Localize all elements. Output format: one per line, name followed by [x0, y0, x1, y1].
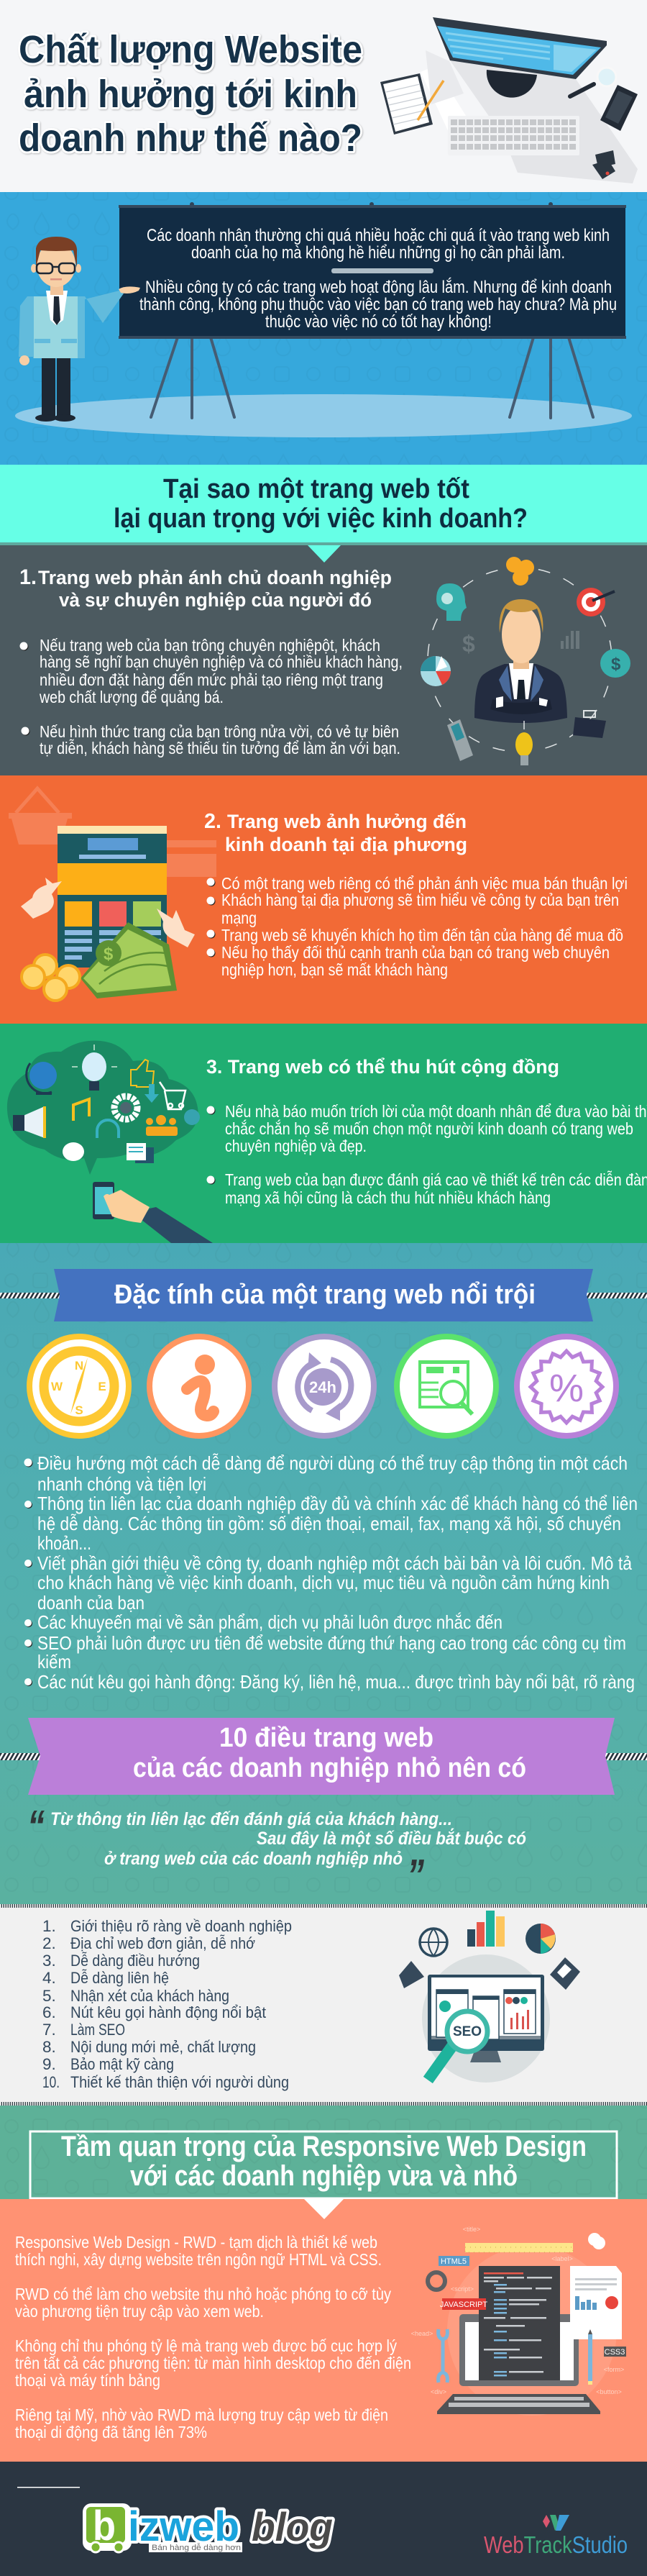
- icon: small globe: [184, 1109, 200, 1125]
- icon: 24h support: 24h: [309, 1378, 336, 1396]
- text block: feature list: doanh của bạn: [37, 1592, 144, 1614]
- panel: reason 2: [0, 775, 647, 1024]
- icon: piggy bank: $: [611, 655, 621, 674]
- logo: bizweb blog: [83, 2503, 333, 2552]
- icon: percent badge: [517, 1337, 616, 1436]
- quote: ở trang web của các doanh nghiệp nhỏ: [104, 1849, 403, 1869]
- label: CSS3: CSS3: [605, 2348, 625, 2357]
- icon: faint bars: [561, 631, 579, 649]
- html tags: <title>: [463, 2226, 480, 2233]
- quote: [27, 1802, 526, 1901]
- logo: bizweb blog: blog: [252, 2504, 333, 2549]
- icon: compass: N: [75, 1359, 83, 1373]
- banner heading: 10 things: 10 điều trang web: [219, 1723, 433, 1753]
- icon: pie chart: [421, 656, 451, 686]
- icon: music note: [73, 1099, 89, 1121]
- text block: vào phương tiện truy cập vào xem web.: [15, 2302, 264, 2321]
- icon: globe: [420, 1929, 447, 1956]
- text block: Nếu trang web của bạn trông chuyên nghiệpột, khách: [40, 636, 380, 655]
- label: JAVASCRIPT: JAVASCRIPT: [440, 2300, 487, 2309]
- icon: shopping cart: [160, 1082, 185, 1109]
- numbered list: Bảo mật kỹ càng: [70, 2055, 174, 2073]
- heading: và sự chuyên nghiệp của người đó: [59, 589, 372, 611]
- icon: gear: [428, 2272, 445, 2290]
- icon: headphones: [97, 1120, 119, 1138]
- numbered list: 7.: [42, 2021, 56, 2039]
- numbered list: 2.: [42, 1934, 56, 1952]
- text block: [207, 874, 628, 979]
- text block: nhiều đơn đặt hàng đến mức phải tạo riêng một trang: [40, 670, 383, 689]
- heading: [61, 2131, 587, 2192]
- numbered list: [42, 1917, 292, 2091]
- icon: lightbulb: [515, 721, 533, 765]
- text block: feature list: kiếm: [37, 1651, 71, 1672]
- text block: [15, 2233, 411, 2441]
- icon: gear: [114, 1096, 137, 1119]
- numbered list: Nhận xét của khách hàng: [70, 1987, 229, 2005]
- icon: chat bubble: [127, 1143, 154, 1163]
- icon: wrench: [439, 2329, 447, 2382]
- text block: nghiệp hơn, bạn sẽ mất khách hàng: [221, 960, 448, 979]
- numbered list: Thiết kế thân thiện với người dùng: [70, 2073, 289, 2091]
- html tags: [411, 2226, 624, 2395]
- icon: credit cards: [592, 150, 615, 179]
- icon: compass: W: [51, 1380, 63, 1393]
- icon: piggy bank: [600, 649, 630, 678]
- text block: Responsive Web Design - RWD - tạm dịch là thiết kế web: [15, 2233, 377, 2252]
- heading: 2.: [204, 810, 221, 833]
- numbered list: 9.: [42, 2055, 56, 2073]
- icon: SEO dashboard: [399, 1911, 580, 2083]
- text block: feature list: Các khuyeến mại về sản phẩm, dịch vụ phải luôn được nhắc đến: [37, 1611, 503, 1633]
- numbered list: 5.: [42, 1987, 56, 2005]
- numbered list: 4.: [42, 1969, 56, 1987]
- icon: compass: E: [98, 1380, 106, 1393]
- text block: feature list: nhanh chóng và tiện lợi: [37, 1473, 206, 1495]
- text block: Không chỉ thu phóng tỷ lệ mà trang web được bố cục hợp lý: [15, 2336, 397, 2355]
- icon: mobile phone: [447, 719, 473, 761]
- text block: feature list: [24, 1452, 638, 1693]
- icon: coins: [506, 557, 534, 586]
- label: HTML5: HTML5: [441, 2257, 467, 2266]
- panel: footer: [0, 2462, 647, 2576]
- title: [19, 28, 362, 160]
- icon: pencil: [588, 2329, 592, 2385]
- html tags: <form>: [604, 2366, 624, 2373]
- icon: download arrow: [144, 1084, 159, 1103]
- panel: header: [0, 0, 647, 192]
- numbered list: 1.: [42, 1917, 56, 1935]
- icon: presenter man: [19, 237, 140, 422]
- intro text: [139, 226, 617, 332]
- html tags: <label>: [551, 2255, 573, 2262]
- title: doanh như thế nào?: [19, 117, 362, 160]
- heading: với các doanh nghiệp vừa và nhỏ: [130, 2160, 518, 2192]
- panel: reason 3: [0, 1024, 647, 1243]
- panel: intro with blackboard: [0, 192, 647, 465]
- numbered list: Làm SEO: [70, 2021, 125, 2039]
- heading: Trang web phản ánh chủ doanh nghiệp: [38, 567, 392, 588]
- html tags: <button>: [596, 2388, 622, 2395]
- title: Chất lượng Website: [19, 28, 362, 71]
- panel: outstanding features: [0, 1243, 647, 1904]
- numbered list: Địa chỉ web đơn giản, dễ nhớ: [70, 1934, 255, 1952]
- text block: mạng: [221, 909, 257, 927]
- logo: WebTrackStudio: WebTrackStudio: [484, 2531, 628, 2558]
- numbered list: 6.: [42, 2003, 56, 2021]
- heading: Tại sao một trang web tốt: [163, 474, 469, 504]
- icon: envelope: [399, 1961, 424, 1988]
- text block: feature list: khoản...: [37, 1532, 91, 1554]
- text block: hàng sẽ nghĩ bạn chuyên nghiệp và có nhiều khách hàng,: [40, 652, 403, 671]
- panel: why heading: [0, 465, 647, 545]
- html tags: <head>: [411, 2330, 433, 2337]
- banner heading: [54, 1269, 593, 1321]
- icon: globe: [27, 1062, 57, 1095]
- text block: [207, 1102, 647, 1207]
- icon: head with gear: [436, 583, 467, 621]
- icon: info: [150, 1337, 249, 1436]
- icon: compass: S: [75, 1403, 83, 1417]
- icon: lightbulb: [72, 1044, 117, 1091]
- logo: bizweb blog: b: [93, 2503, 116, 2549]
- quote: “: [27, 1802, 45, 1852]
- text block: chuyên nghiệp và đẹp.: [225, 1137, 367, 1155]
- icon: ruler: [465, 2243, 573, 2252]
- heading: Trang web ảnh hưởng đến: [227, 811, 467, 832]
- heading: 1.: [19, 565, 37, 589]
- numbered list: 8.: [42, 2038, 56, 2056]
- icon: laptop with code: [411, 2226, 626, 2416]
- icon: speech cloud of social icons: [7, 1041, 200, 1175]
- heading: [114, 474, 528, 534]
- icon: desk with monitor: [380, 17, 638, 183]
- panel: reason 1: [0, 545, 647, 775]
- board: [119, 202, 626, 418]
- icon: website on phone: [21, 826, 195, 1001]
- icon: briefcase: [573, 711, 606, 738]
- text block: Nếu hình thức trang của bạn trông nửa vời, có vẻ tự biên: [40, 722, 399, 741]
- numbered list: Giới thiệu rõ ràng về doanh nghiệp: [70, 1917, 292, 1935]
- text block: RWD có thể làm cho website thu nhỏ hoặc phóng to cỡ tùy: [15, 2285, 391, 2303]
- icon: bird: [63, 1142, 84, 1161]
- banner heading: 10 things: [28, 1718, 615, 1795]
- text block: thoại và máy tính bảng: [15, 2371, 160, 2390]
- icon: percent badge: %: [549, 1367, 584, 1410]
- logo: bizweb blog: izweb: [128, 2503, 239, 2550]
- intro text: thuộc vào việc nó có tốt hay không!: [265, 312, 492, 332]
- icon: calculator: [550, 1957, 580, 1990]
- logo: bizweb blog: Bán hàng dễ dàng hơn: [152, 2543, 241, 2552]
- icon: megaphone: [13, 1106, 46, 1138]
- numbered list: Nội dung mới mẻ, chất lượng: [70, 2038, 256, 2056]
- quote: Sau đây là một số điều bắt buộc có: [257, 1828, 526, 1849]
- banner heading: Đặc tính của một trang web nổi trội: [114, 1280, 536, 1310]
- panel: responsive design heading: [0, 2106, 647, 2199]
- code panel: [479, 2266, 560, 2380]
- heading: lại quan trọng với việc kinh doanh?: [114, 504, 528, 534]
- icon: hand holding phone: [93, 1182, 213, 1243]
- numbered list: 3.: [42, 1952, 56, 1970]
- text block: web chất lượng để quảng bá.: [39, 688, 224, 706]
- text block: trên tất cả các phương tiện: từ màn hình desktop cho đến điện: [15, 2354, 411, 2372]
- heading: [19, 565, 392, 611]
- icon: bar chart: [467, 1911, 505, 1947]
- quote: ”: [407, 1851, 424, 1901]
- icon: cloud: [588, 2233, 605, 2249]
- quote: Từ thông tin liên lạc đến đánh giá của khách hàng...: [50, 1809, 452, 1829]
- text block: tự diễn, khách hàng sẽ thiếu tin tưởng để làm ăn với bạn.: [40, 739, 400, 757]
- icon: people: [146, 1115, 178, 1136]
- icon: businessman with ring of icons: [421, 557, 630, 765]
- icon: 24h support: [275, 1337, 374, 1436]
- numbered list: Dễ dàng điều hướng: [70, 1952, 200, 1970]
- icon: pie chart: [526, 1924, 556, 1954]
- icon: notepad and pencil: [380, 73, 444, 135]
- icon: faint dollar: $: [462, 631, 475, 657]
- html tags: <div>: [431, 2388, 446, 2395]
- icon: faded basket and card: [9, 788, 216, 877]
- icon: coins: [22, 955, 80, 1001]
- text block: mạng xã hội cũng là cách thu hút nhiều khách hàng: [225, 1188, 551, 1207]
- icon: thumb up: [131, 1060, 154, 1087]
- icon: keyboard: [448, 116, 579, 155]
- numbered list: Dễ dàng liên hệ: [70, 1969, 169, 1987]
- text block: thoại di động đã tăng lên 73%: [15, 2423, 207, 2441]
- text block: [20, 636, 403, 757]
- icon: tablet and pen: [570, 68, 638, 131]
- icon: banknotes: $: [104, 945, 114, 964]
- icon: web search: [397, 1337, 496, 1436]
- logo: WebTrackStudio: [484, 2515, 628, 2558]
- heading: 3. Trang web có thể thu hút cộng đồng: [206, 1056, 559, 1078]
- title: ảnh hưởng tới kinh: [24, 73, 357, 116]
- text block: Riêng tại Mỹ, nhờ vào RWD mà lượng truy cập web từ điện: [15, 2406, 388, 2424]
- numbered list: Nút kêu gọi hành động nổi bật: [70, 2003, 267, 2021]
- heading: [204, 810, 467, 855]
- icon: SEO dashboard: SEO: [453, 2024, 482, 2039]
- numbered list: 10.: [42, 2073, 60, 2091]
- icon: target: [577, 588, 615, 616]
- panel: ten things list: [0, 1904, 647, 2106]
- icon: compass: [29, 1337, 129, 1436]
- intro text: doanh của họ mà không hề hiểu những gì họ cần phải làm.: [191, 243, 565, 263]
- text block: thích nghi, xây dựng website trên ngôn ngữ HTML và CSS.: [15, 2250, 382, 2269]
- icon: banknotes: [81, 922, 177, 998]
- heading: kinh doanh tại địa phương: [225, 834, 467, 855]
- decorative rope: [0, 1753, 40, 1760]
- document: [570, 2266, 622, 2339]
- html tags: <script>: [451, 2285, 474, 2293]
- panel: responsive design: [0, 2199, 647, 2462]
- icon: pointing hands: [21, 878, 195, 947]
- banner heading: 10 things: của các doanh nghiệp nhỏ nên có: [133, 1753, 526, 1783]
